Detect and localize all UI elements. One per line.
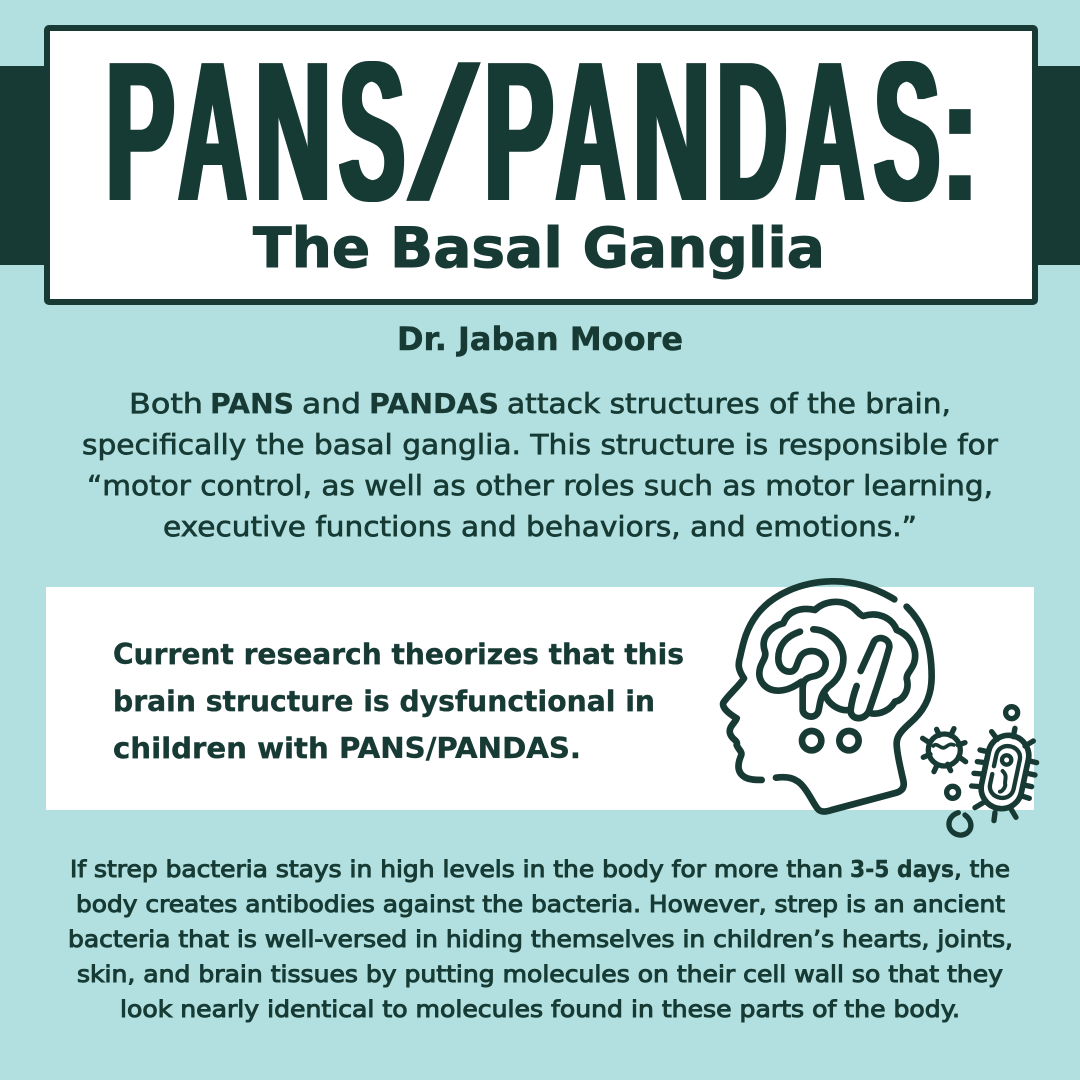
brain outline — [759, 602, 915, 714]
bottom paragraph: bacteria that is well-versed in hiding themselves in children’s hearts, joints, — [68, 925, 1013, 953]
header band — [0, 66, 1080, 265]
title — [106, 21, 978, 243]
callout text: Current research theorizes that this — [113, 638, 684, 671]
intro paragraph: PANS — [210, 387, 294, 420]
subtitle: The Basal Ganglia — [253, 216, 825, 280]
callout text: children with PANS/PANDAS. — [113, 732, 581, 765]
bacteria — [972, 728, 1037, 821]
small circles — [947, 707, 1018, 835]
intro paragraph: specifically the basal ganglia. This structure is responsible for — [82, 428, 999, 461]
title: S — [874, 21, 940, 243]
title: A — [796, 21, 864, 243]
callout text: brain structure is dysfunctional in — [113, 685, 655, 718]
callout text — [113, 638, 684, 765]
title: : — [942, 38, 978, 239]
title: / — [408, 31, 479, 238]
bottom paragraph: body creates antibodies against the bacteria. However, strep is an ancient — [76, 890, 1005, 918]
intro paragraph: and — [302, 387, 361, 420]
icon: head with brain and question mark — [723, 581, 932, 812]
title: N — [633, 21, 710, 243]
title: P — [484, 21, 554, 243]
icon: virus and bacteria — [923, 707, 1037, 835]
callout panel — [46, 587, 1034, 810]
bottom paragraph: , the — [954, 855, 1010, 883]
bottom paragraph — [68, 855, 1013, 1023]
question mark — [778, 629, 843, 717]
title: D — [717, 21, 787, 243]
virus — [923, 729, 966, 772]
title: A — [556, 21, 625, 243]
title: N — [255, 21, 331, 243]
title: S — [339, 21, 405, 243]
intro paragraph: attack structures of the brain, — [507, 387, 951, 420]
title box — [47, 28, 1035, 302]
intro paragraph: executive functions and behaviors, and emotions.” — [163, 510, 917, 543]
intro paragraph: PANDAS — [369, 387, 499, 420]
dots — [802, 731, 821, 750]
intro paragraph — [82, 387, 999, 543]
bottom paragraph: 3-5 days — [850, 855, 954, 883]
intro paragraph: “motor control, as well as other roles such as motor learning, — [87, 469, 993, 502]
bottom paragraph: look nearly identical to molecules found in these parts of the body. — [120, 995, 960, 1023]
title: P — [106, 21, 175, 243]
author: Dr. Jaban Moore — [397, 320, 683, 358]
intro paragraph: Both — [129, 387, 203, 420]
title: A — [179, 21, 247, 243]
slash I — [851, 638, 889, 718]
bottom paragraph: skin, and brain tissues by putting molecules on their cell wall so that they — [77, 960, 1003, 988]
bottom paragraph: If strep bacteria stays in high levels in the body for more than — [70, 855, 843, 883]
